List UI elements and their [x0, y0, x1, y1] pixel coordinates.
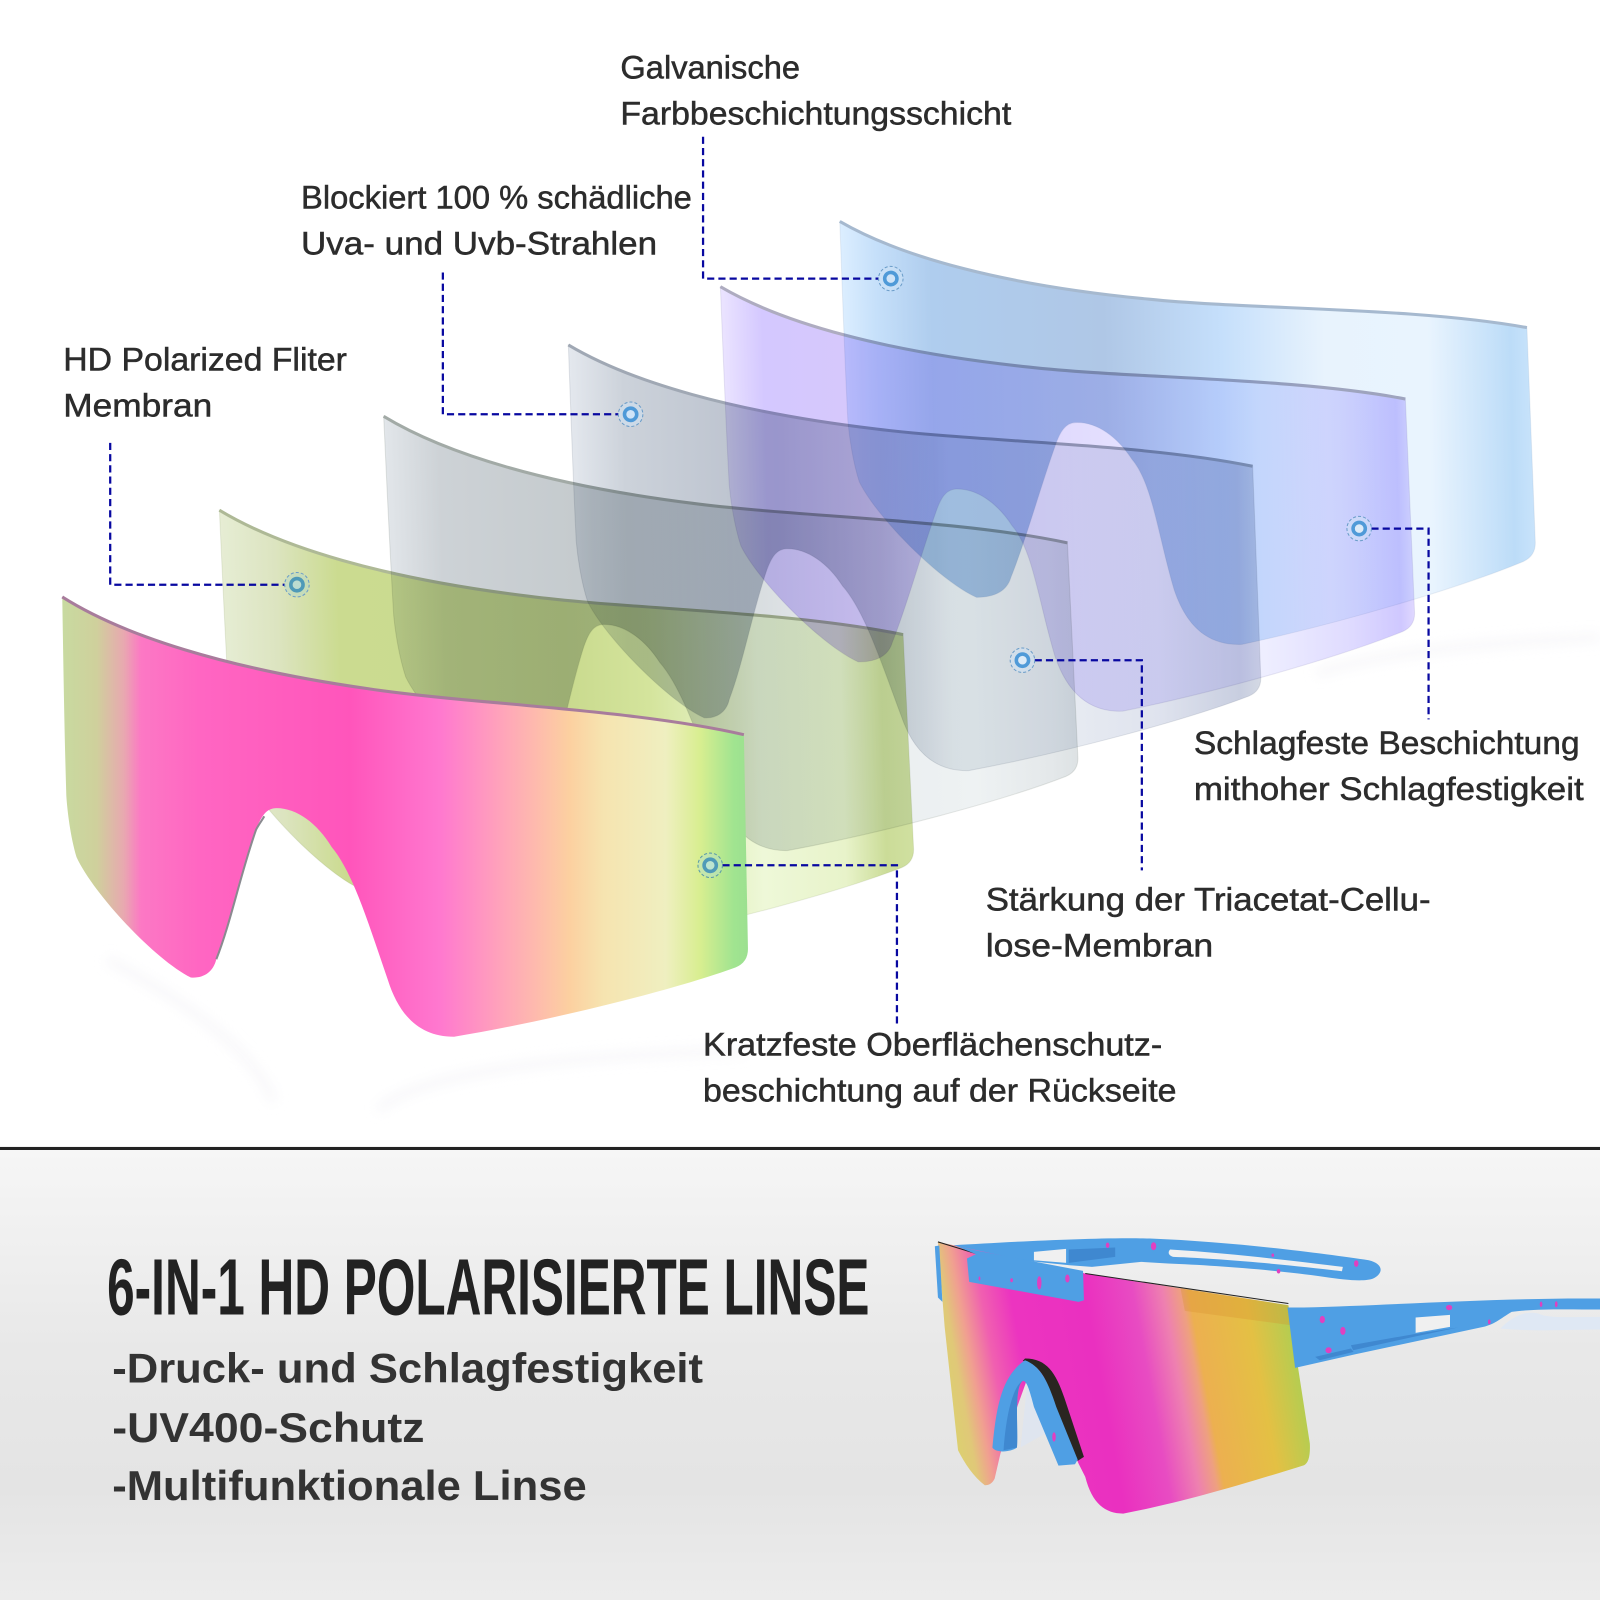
label: UV layer: Uva- und Uvb-Strahlen: [301, 225, 657, 262]
feature list: -Multifunktionale Linse: [112, 1462, 587, 1509]
nose pad blue: [992, 1360, 1078, 1466]
label: scratch coating: [703, 1026, 1177, 1109]
nose pad clear: [1021, 1384, 1045, 1448]
leader line: UV layer: [443, 272, 618, 414]
product photo: sunglasses: [935, 1238, 1600, 1514]
lens: [938, 1242, 1310, 1514]
near temple shading: [1315, 1328, 1458, 1360]
label: galvanic layer: [620, 49, 1011, 131]
nose pad dark backing: [1023, 1359, 1084, 1461]
label: galvanic layer: Farbbeschichtungsschicht: [620, 94, 1011, 131]
label: TAC membrane: [986, 881, 1431, 964]
label: polarized layer: [63, 340, 347, 423]
floor reflection: [107, 638, 1600, 1110]
lens layer: slate: [568, 330, 1262, 779]
marker: TAC membrane: [1010, 648, 1035, 672]
bottom panel: [0, 1147, 1600, 1600]
leader line: impact coating: [1371, 529, 1429, 719]
label: impact coating: Schlagfeste Beschichtung: [1194, 724, 1580, 761]
label: scratch coating: beschichtung auf der Rückseite: [703, 1072, 1177, 1109]
marker: polarized layer: [285, 572, 309, 597]
top lens edge: [938, 1242, 1288, 1304]
label: impact coating: [1194, 724, 1584, 807]
near temple inner: [1500, 1313, 1600, 1330]
lens layer: blue: [840, 189, 1537, 663]
label: TAC membrane: Stärkung der Triacetat-Cellu-: [986, 881, 1431, 918]
marker: galvanic layer: [879, 266, 903, 291]
label: polarized layer: HD Polarized Fliter: [63, 340, 347, 377]
lens layer: gray: [384, 405, 1081, 857]
far temple openings: [1034, 1249, 1343, 1271]
label: UV layer: Blockiert 100 % schädliche: [301, 179, 692, 216]
heading: 6-IN-1 HD POLARISIERTE LINSE: [107, 1242, 869, 1331]
far temple arm: [954, 1238, 1381, 1280]
label: polarized layer: Membran: [63, 386, 212, 423]
marker: UV layer: [618, 402, 643, 427]
leader line: galvanic layer: [703, 137, 879, 279]
far temple inner shade: [1069, 1248, 1115, 1263]
feature list: [112, 1345, 703, 1509]
feature list: -UV400-Schutz: [112, 1404, 424, 1451]
leader line: TAC membrane: [1035, 660, 1142, 870]
lens reflection band: [1180, 1288, 1291, 1325]
feature list: -Druck- und Schlagfestigkeit: [112, 1345, 703, 1392]
marker: scratch coating: [698, 853, 722, 878]
leader line: scratch coating: [722, 865, 897, 1023]
label: galvanic layer: Galvanische: [620, 49, 800, 86]
lens layer: green: [219, 497, 916, 950]
lens layer: purple: [720, 261, 1417, 726]
label: impact coating: mithoher Schlagfestigkeit: [1194, 770, 1584, 807]
near temple arm: [1288, 1298, 1600, 1368]
brow piece: [954, 1245, 1084, 1302]
left brow tab: [935, 1246, 942, 1302]
lens layer: pink mirror: [62, 597, 748, 1037]
label: TAC membrane: lose-Membran: [986, 927, 1213, 964]
near temple opening: [1416, 1315, 1450, 1333]
label: scratch coating: Kratzfeste Oberflächenschutz-: [703, 1026, 1162, 1063]
leader line: polarized layer: [110, 443, 285, 585]
marker: impact coating: [1347, 516, 1371, 541]
pink speckles: [979, 1242, 1558, 1442]
label: UV layer: [301, 179, 692, 262]
